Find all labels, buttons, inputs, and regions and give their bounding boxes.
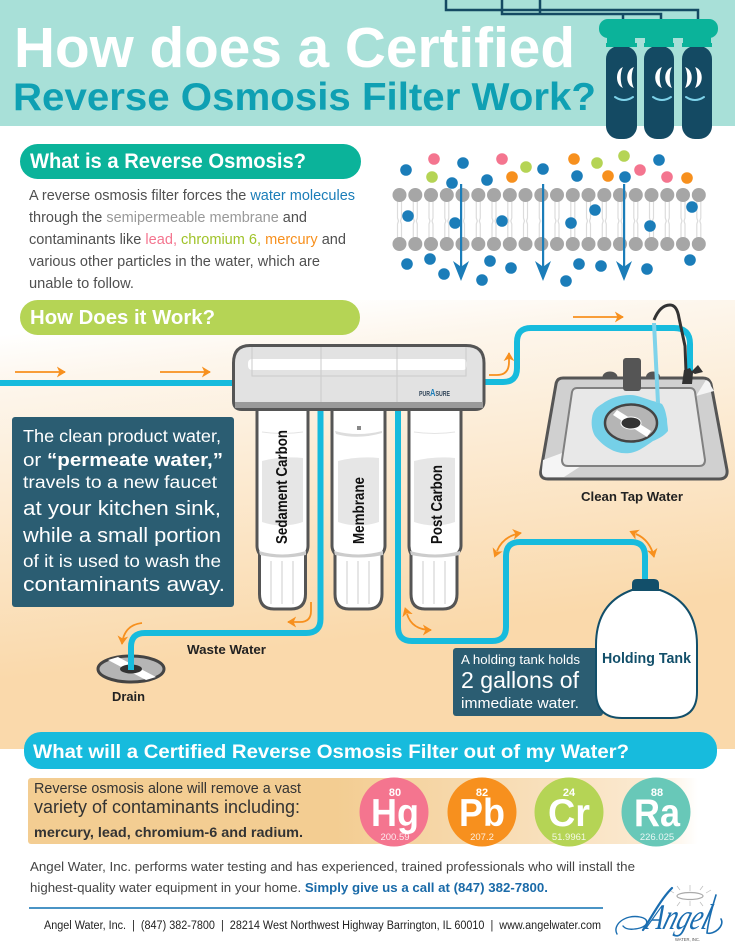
callout: permeate water xyxy=(12,417,234,607)
element: radium: Ra xyxy=(634,792,680,835)
filter: sedament carbon: Sedament Carbon xyxy=(274,430,291,544)
footer contact line: Angel Water, Inc. | (847) 382-7800 | 28214 West Northwest Highway Barrington, IL 60010 | www.angelwater.com xyxy=(44,920,601,932)
logo: angel water xyxy=(616,885,722,942)
text block: call to action: highest-quality water equipment in your home. Simply give us a call at (847) 382-7800. xyxy=(30,880,548,895)
element: chromium: 51.9961 xyxy=(552,832,586,843)
logo: angel water: WATER, INC. xyxy=(675,937,700,942)
illustration: faucet with running water xyxy=(652,305,703,403)
filter: membrane: Membrane xyxy=(351,477,368,544)
element: lead: 82 xyxy=(476,787,488,799)
element: lead: Pb xyxy=(459,792,505,835)
illustration: sink xyxy=(541,358,727,479)
element: chromium: Cr xyxy=(548,792,590,835)
icon: three smiling filter cartridges xyxy=(446,0,718,139)
heading: how does it work: How Does it Work? xyxy=(30,307,215,329)
text block: contaminants description: variety of contaminants including: xyxy=(34,797,300,817)
text block: contaminants description: Reverse osmosis alone will remove a vast xyxy=(34,780,302,797)
text block: osmosis explanation: A reverse osmosis filter forces the water molecules xyxy=(29,188,355,204)
text block: call to action xyxy=(30,859,635,895)
panel: how it works background xyxy=(0,300,735,749)
text block: call to action: Angel Water, Inc. performs water testing and has experienced, trained professionals who will install the xyxy=(30,859,635,874)
callout: holding tank capacity: A holding tank holds xyxy=(461,652,581,667)
filter: post carbon xyxy=(409,408,461,609)
element: mercury: Hg xyxy=(371,792,419,835)
element: radium xyxy=(622,778,690,846)
element: lead: 207.2 xyxy=(470,832,494,843)
filter manifold unit: PURASURE xyxy=(419,388,450,399)
title: How does a Certified xyxy=(14,16,575,80)
diagram: semipermeable membrane with molecules xyxy=(392,150,706,287)
callout: holding tank capacity: 2 gallons of xyxy=(461,667,580,693)
filter: sedament carbon xyxy=(257,408,308,609)
heading: what will a filter remove xyxy=(24,732,717,769)
heading: how does it work xyxy=(20,300,360,335)
panel: contaminants band xyxy=(28,778,698,844)
title: Reverse Osmosis Filter Work? xyxy=(13,76,596,119)
callout: permeate water: of it is used to wash the xyxy=(23,551,221,571)
header banner background xyxy=(0,0,735,126)
element: radium: 88 xyxy=(651,787,663,799)
filter: membrane xyxy=(332,408,385,609)
text block: osmosis explanation: contaminants like lead, chromium 6, mercury and xyxy=(29,232,346,248)
filter: post carbon: Post Carbon xyxy=(429,465,446,544)
callout: permeate water: or “permeate water,” xyxy=(23,450,223,470)
callout: permeate water: contaminants away. xyxy=(23,574,225,596)
callout: permeate water: The clean product water, xyxy=(23,426,221,446)
illustration: holding tank: Holding Tank xyxy=(602,651,692,667)
heading: what is reverse osmosis: What is a Reverse Osmosis? xyxy=(30,150,306,173)
label: waste water: Waste Water xyxy=(187,642,266,657)
title xyxy=(13,16,596,119)
text block: contaminants description xyxy=(34,780,303,840)
element: chromium xyxy=(534,778,604,846)
callout: permeate water: while a small portion xyxy=(22,525,221,547)
element: radium: 226.025 xyxy=(640,832,674,843)
element: mercury: 80 xyxy=(389,787,401,799)
text block: osmosis explanation: various other particles in the water, which are xyxy=(29,254,320,270)
element: chromium: 24 xyxy=(563,787,576,799)
icon: floor drain xyxy=(98,650,164,682)
heading: what will a filter remove: What will a Certified Reverse Osmosis Filter out of my Water? xyxy=(33,741,629,763)
element: mercury: 200.59 xyxy=(380,832,410,843)
label: clean tap water: Clean Tap Water xyxy=(581,489,683,504)
orange flow arrows xyxy=(15,317,654,644)
label: drain: Drain xyxy=(112,689,145,704)
text block: contaminants description: mercury, lead, chromium-6 and radium. xyxy=(34,824,303,840)
callout: permeate water: travels to a new faucet xyxy=(23,472,217,492)
heading: what is reverse osmosis xyxy=(20,144,361,179)
callout: holding tank capacity: immediate water. xyxy=(461,696,579,712)
element: lead xyxy=(448,778,516,846)
callout: permeate water: at your kitchen sink, xyxy=(23,498,221,520)
filter manifold unit xyxy=(234,346,484,414)
element: mercury xyxy=(360,778,428,846)
water pipes xyxy=(0,328,690,671)
callout: holding tank capacity xyxy=(453,648,603,716)
illustration: holding tank xyxy=(596,579,697,718)
text block: osmosis explanation xyxy=(29,188,355,292)
text block: osmosis explanation: through the semipermeable membrane and xyxy=(29,210,307,226)
text block: osmosis explanation: unable to follow. xyxy=(29,276,134,292)
